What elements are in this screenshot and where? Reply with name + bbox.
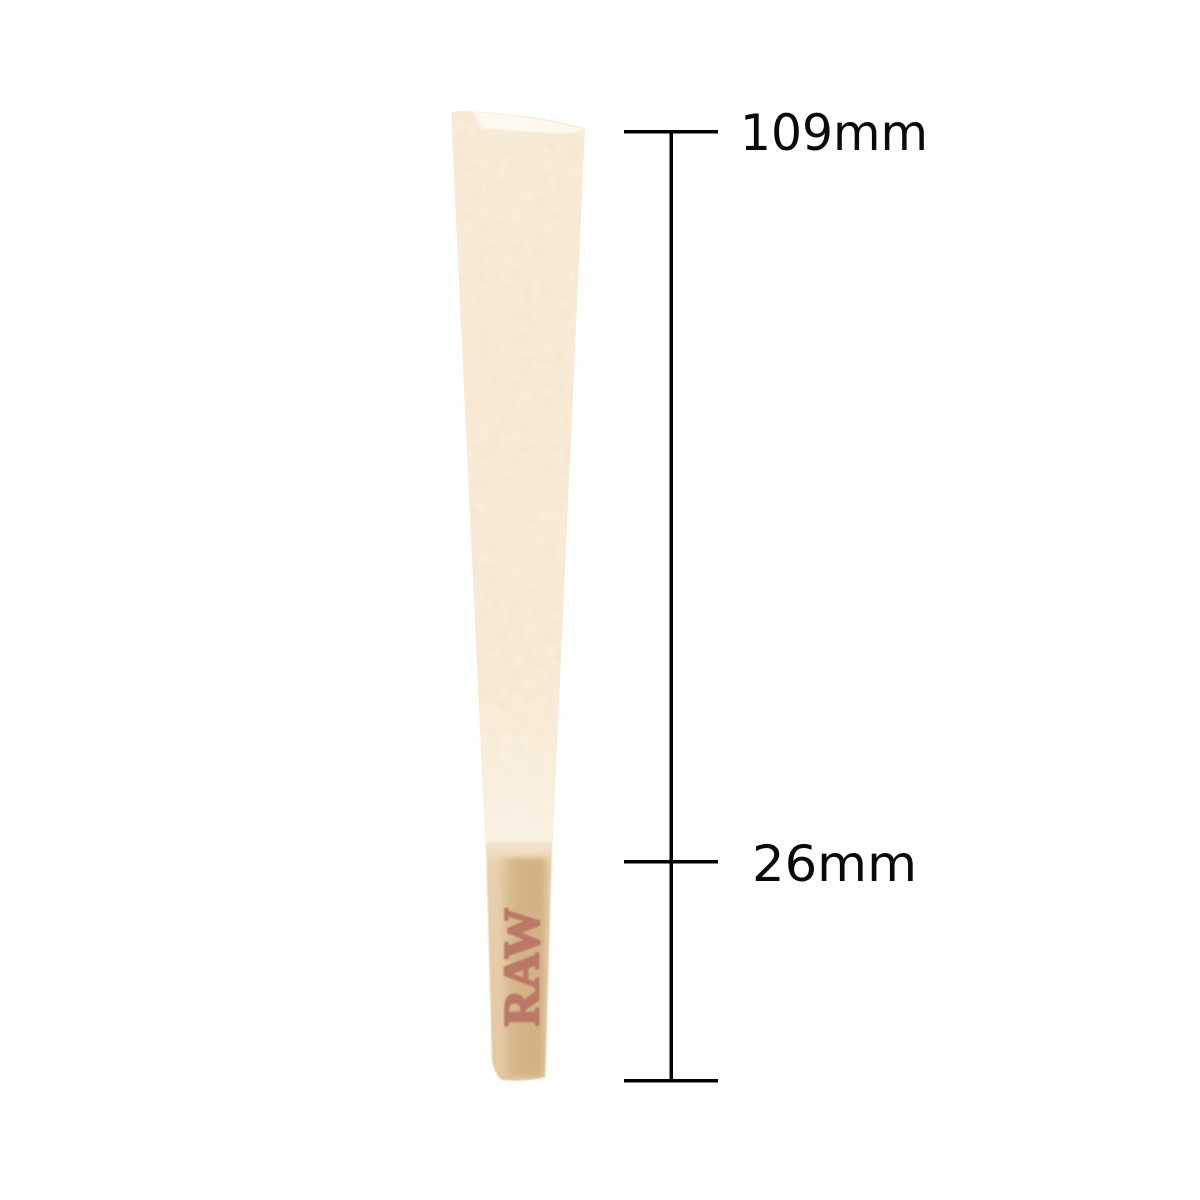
vertical measure line [670,130,673,1082]
fade toward filter tip [479,680,560,858]
label: total length: 109mm [740,104,928,162]
filter tip [486,842,552,1081]
cone illustration [451,111,585,1081]
bottom tick [624,1079,718,1082]
top tick [624,130,718,134]
middle tick [624,860,718,864]
cone paper body [451,111,585,857]
dimension scale [624,130,718,1082]
RAW logo: RAW [493,908,549,1026]
cone opening [474,112,583,133]
filter tip inner core [500,858,549,1076]
label: tip length: 26mm [752,835,917,893]
